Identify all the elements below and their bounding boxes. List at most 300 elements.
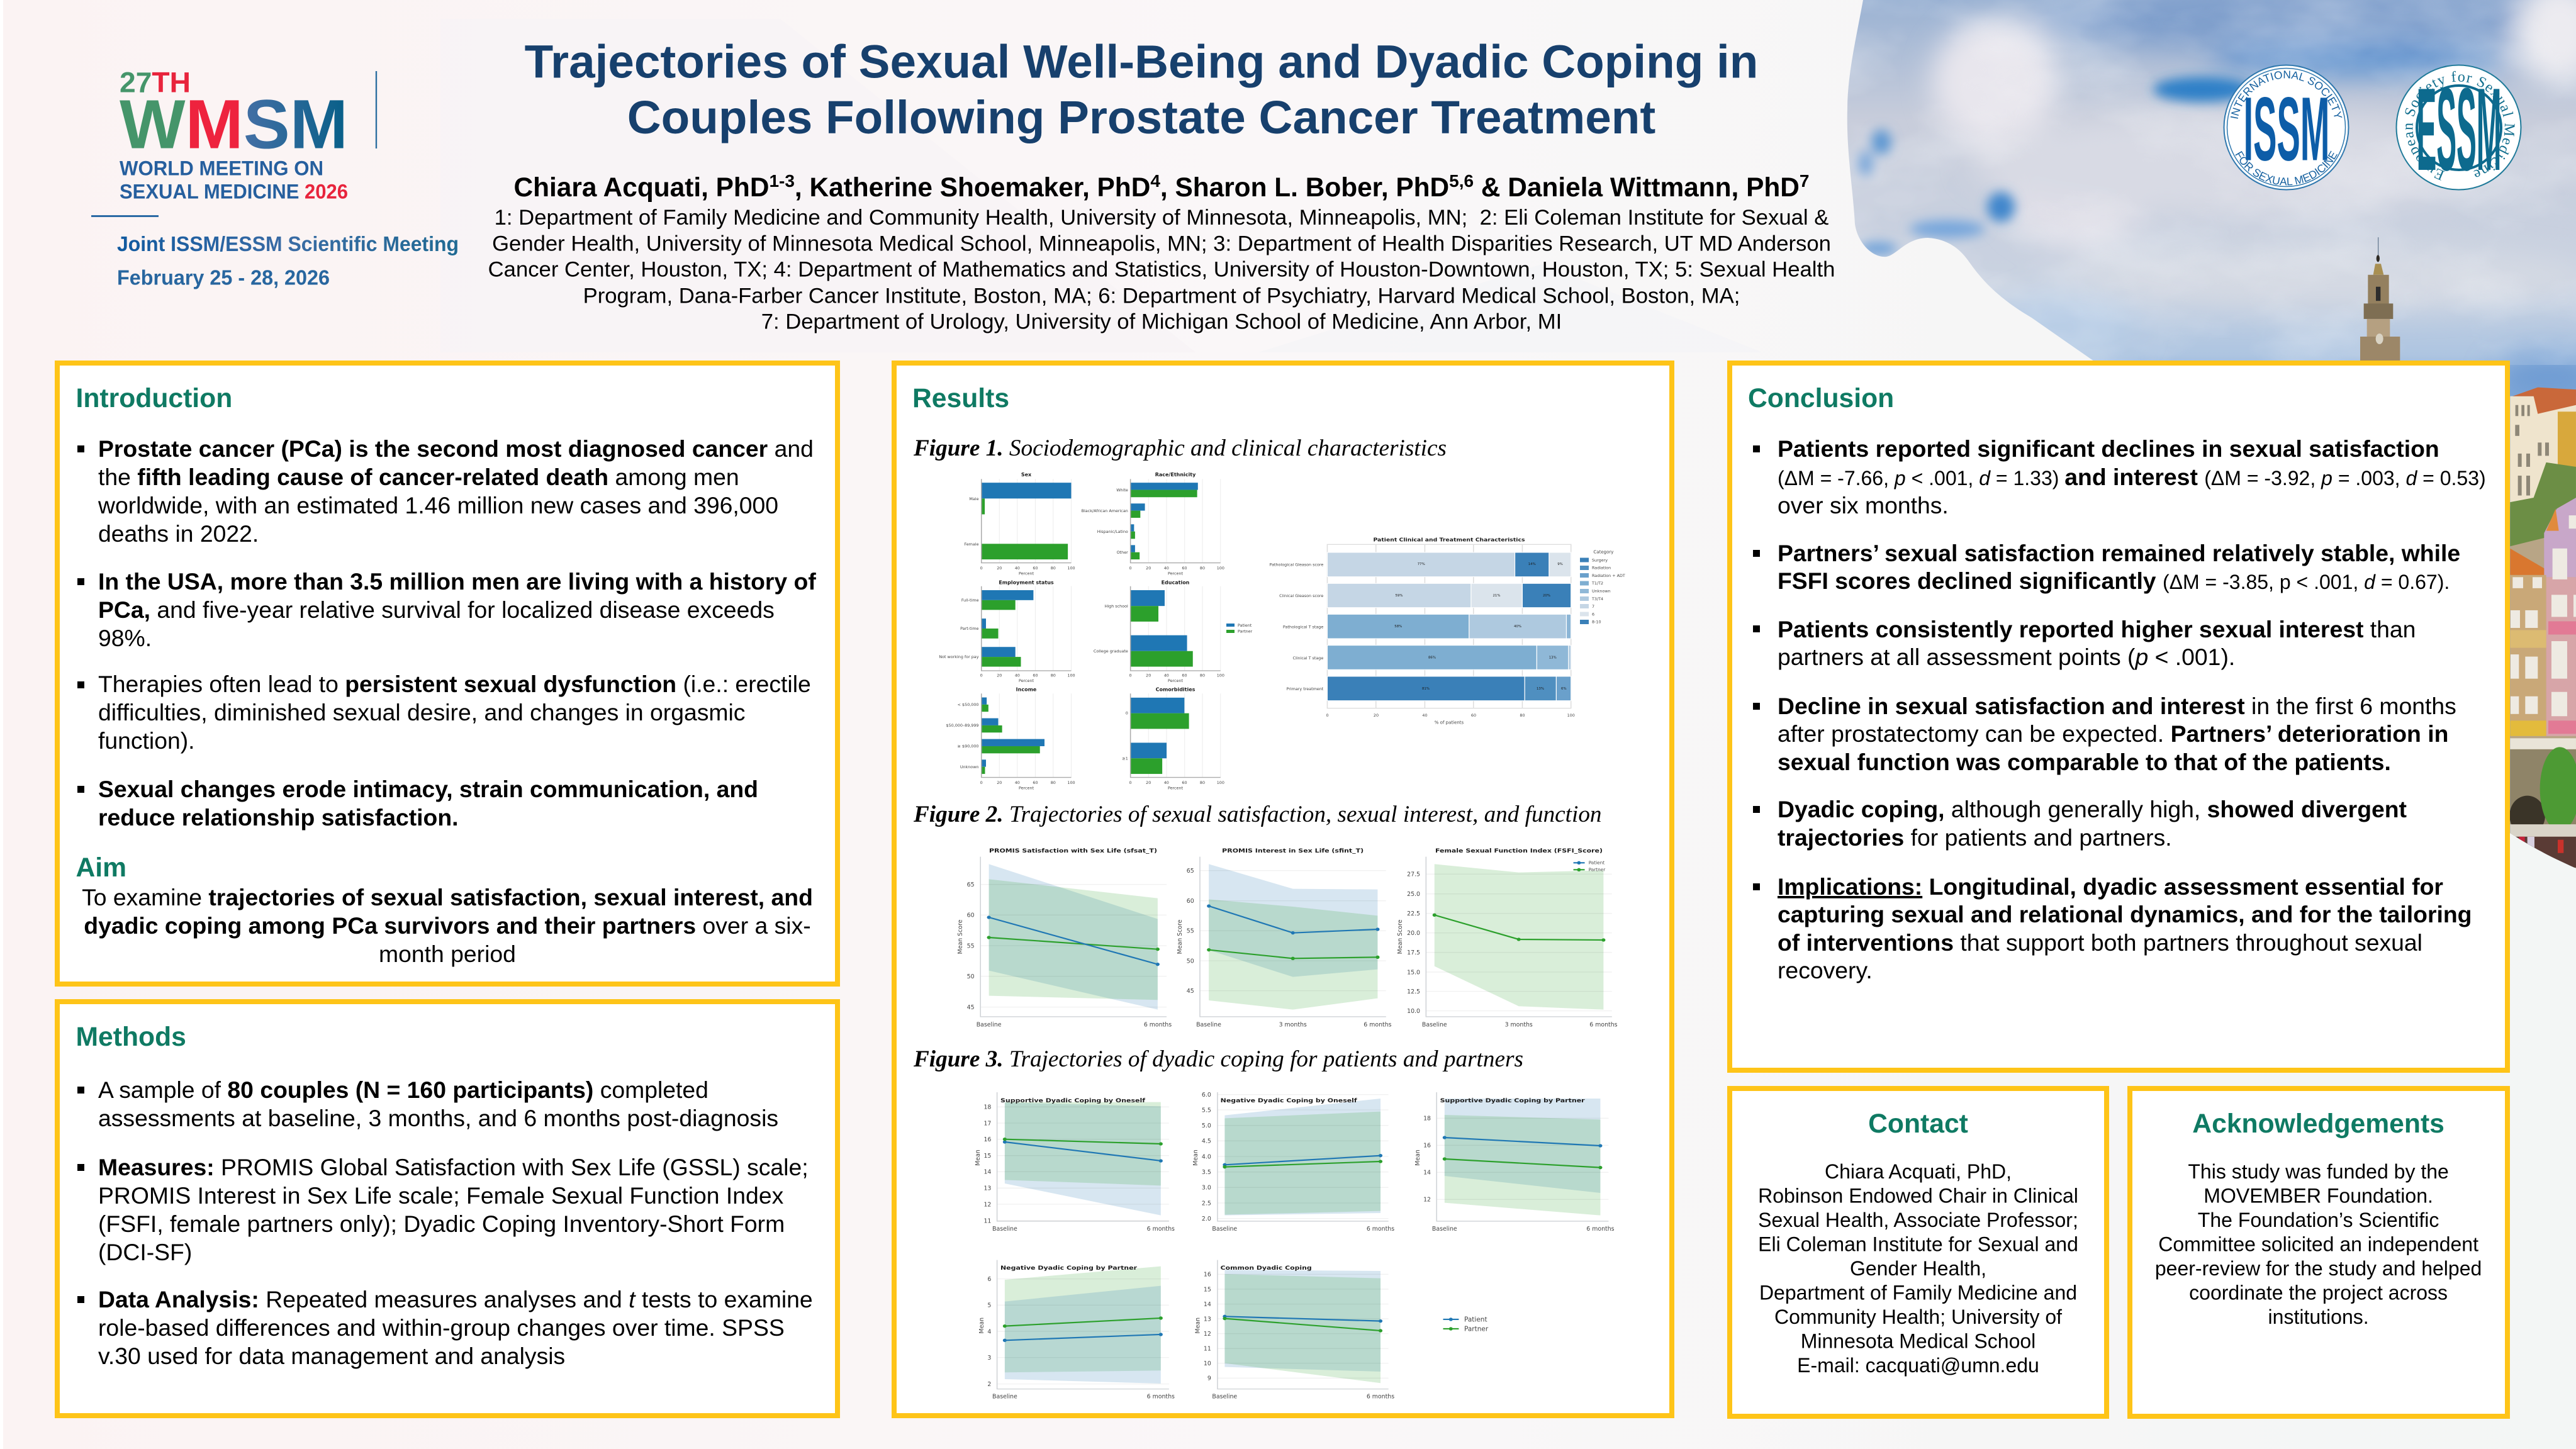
- chart: education: Percent: [1168, 678, 1184, 683]
- authors: 7: [1800, 171, 1809, 191]
- chart: patient clinical and treatment characteristics: 81%: [1422, 687, 1430, 691]
- chart: common dyadic coping: 14: [1204, 1301, 1211, 1308]
- chart: income: 60: [1033, 780, 1038, 785]
- chart: PROMIS satisfaction with sex life: 55: [967, 943, 975, 949]
- chart: patient clinical and treatment characteristics: 100: [1567, 713, 1575, 718]
- chart: sex: 20: [997, 566, 1002, 571]
- heading: introduction: Introduction: [76, 383, 232, 413]
- legend: treatment categories: Surgery: [1592, 557, 1608, 562]
- chart: negative dyadic coping by oneself: 4.5: [1202, 1138, 1211, 1145]
- chart: income: Percent: [1019, 785, 1034, 790]
- chart: income: $50,000–89,999: [946, 723, 979, 728]
- chart: common dyadic coping: 12: [1204, 1331, 1211, 1338]
- chart: sex: 80: [1051, 566, 1056, 571]
- logo text: 27TH: 27TH: [120, 66, 191, 98]
- text block: conclusion bullets: partners at all assessment points (p < .001).: [1778, 644, 2235, 670]
- text block: introduction bullets: function).: [98, 727, 195, 754]
- text block: methods bullets: v.30 used for data management and analysis: [98, 1343, 565, 1369]
- text block: introduction bullets: reduce relationship satisfaction.: [98, 804, 459, 831]
- chart: race and ethnicity: Percent: [1168, 571, 1184, 576]
- chart: income: Income: [1016, 687, 1037, 692]
- text block: conclusion bullets: over six months.: [1778, 492, 1949, 518]
- chart: PROMIS interest in sex life: Baseline: [1196, 1022, 1221, 1028]
- chart: patient clinical and treatment characteristics: 59%: [1396, 594, 1403, 598]
- chart: income: 20: [997, 780, 1002, 785]
- text block: conclusion bullets: Dyadic coping, although generally high, showed divergent: [1778, 796, 2407, 822]
- chart: negative dyadic coping by partner: 6: [987, 1276, 991, 1283]
- chart: PROMIS satisfaction with sex life: Mean Score: [957, 919, 964, 954]
- heading: results: Results: [912, 383, 1009, 413]
- chart: female sexual function index: 27.5: [1407, 871, 1420, 878]
- chart: negative dyadic coping by oneself: [1192, 1092, 1394, 1233]
- chart: supportive dyadic coping by partner: 16: [1423, 1143, 1431, 1150]
- text block: conclusion bullets: Patients consistently reported higher sexual interest than: [1778, 616, 2416, 642]
- heading: acknowledgements: Acknowledgements: [2192, 1109, 2444, 1139]
- text block: contact details: E-mail: cacquati@umn.edu: [1797, 1354, 2039, 1377]
- chart: income: 40: [1015, 780, 1020, 785]
- photo: riverside buildings: [2509, 388, 2576, 868]
- chart: common dyadic coping: 9: [1207, 1375, 1211, 1382]
- chart: female sexual function index: [1397, 848, 1618, 1028]
- legend: treatment categories: 6: [1592, 612, 1594, 617]
- chart: common dyadic coping: 13: [1204, 1316, 1211, 1323]
- chart: comorbidities: 0: [1126, 711, 1128, 716]
- chart: supportive dyadic coping by oneself: 14: [983, 1169, 991, 1176]
- chart: patient clinical and treatment characteristics: 20%: [1543, 594, 1550, 598]
- text block: aim: month period: [379, 941, 516, 967]
- chart: PROMIS interest in sex life: 55: [1187, 928, 1194, 935]
- chart: patient clinical and treatment characteristics: Clinical Gleason score: [1279, 593, 1323, 598]
- chart: PROMIS satisfaction with sex life: Baseline: [977, 1022, 1002, 1028]
- meeting name and dates: [117, 232, 459, 289]
- chart: supportive dyadic coping by partner: Baseline: [1432, 1226, 1457, 1233]
- chart: comorbidities: [1122, 687, 1224, 790]
- text block: aim: [82, 884, 813, 967]
- chart: employment status: 100: [1067, 673, 1075, 678]
- text block: conclusion bullets: recovery.: [1778, 957, 1873, 983]
- chart: negative dyadic coping by oneself: 2.5: [1202, 1200, 1211, 1207]
- chart: race and ethnicity: White: [1116, 488, 1128, 493]
- chart: supportive dyadic coping by oneself: Supportive Dyadic Coping by Oneself: [1000, 1098, 1145, 1104]
- chart: PROMIS interest in sex life: PROMIS Interest in Sex Life (sfint_T): [1222, 848, 1364, 854]
- chart: negative dyadic coping by oneself: 4.0: [1202, 1153, 1211, 1160]
- meeting name and dates: February 25 - 28, 2026: [117, 266, 330, 289]
- chart: female sexual function index: Partner: [1589, 867, 1605, 872]
- chart: patient clinical and treatment characteristics: 13%: [1549, 656, 1557, 659]
- chart: education: Education: [1162, 580, 1190, 585]
- icon: ISSM society logo: INTERNATIONAL SOCIETY: [2230, 70, 2342, 119]
- chart: supportive dyadic coping by oneself: Baseline: [992, 1226, 1017, 1233]
- chart: PROMIS satisfaction with sex life: 65: [967, 881, 975, 888]
- text block: methods bullets: role-based differences and within-group changes over time. SPSS: [98, 1314, 785, 1341]
- authors: 5,6: [1449, 171, 1474, 191]
- chart: female sexual function index: 22.5: [1407, 910, 1420, 917]
- text block: acknowledgements: The Foundation’s Scientific: [2198, 1209, 2439, 1231]
- chart: supportive dyadic coping by oneself: Mean: [975, 1150, 982, 1166]
- chart: common dyadic coping: Mean: [1194, 1318, 1202, 1333]
- chart: education: [1094, 580, 1224, 683]
- chart: sex: Percent: [1019, 571, 1034, 576]
- chart: supportive dyadic coping by partner: Mean: [1414, 1150, 1421, 1166]
- text block: aim: dyadic coping among PCa survivors and their partners over a six-: [84, 912, 811, 939]
- logo divider: [376, 71, 377, 148]
- chart: sex: 0: [980, 566, 983, 571]
- chart: patient clinical and treatment characteristics: [1270, 537, 1625, 725]
- chart: supportive dyadic coping by partner: 12: [1423, 1197, 1431, 1204]
- chart: negative dyadic coping by partner: 3: [987, 1355, 991, 1362]
- text block: conclusion bullets: Partners’ sexual satisfaction remained relatively stable, while: [1778, 540, 2460, 566]
- chart: income: < $50,000: [958, 702, 979, 707]
- chart: common dyadic coping: 10: [1204, 1360, 1211, 1367]
- chart: patient clinical and treatment characteristics: Pathological Gleason score: [1270, 562, 1323, 568]
- chart: sex: Female: [964, 542, 979, 547]
- legend: treatment categories: 8-10: [1592, 619, 1601, 624]
- panel: results: [894, 363, 1672, 1416]
- text block: introduction bullets: PCa, and five-year relative survival for localized disease exceeds: [98, 596, 775, 623]
- chart: PROMIS interest in sex life: 6 months: [1364, 1022, 1392, 1028]
- chart: income: 80: [1051, 780, 1056, 785]
- text block: contact details: Community Health; University of: [1774, 1306, 2062, 1328]
- authors: 1-3: [769, 171, 795, 191]
- text block: conclusion bullets: [1753, 435, 2486, 983]
- chart: comorbidities: Percent: [1168, 785, 1184, 790]
- affiliations: Cancer Center, Houston, TX; 4: Department of Mathematics and Statistics, University of Houston-Downtown, Houston, TX; 5: Sexual Health: [488, 258, 1835, 282]
- chart: female sexual function index: Baseline: [1422, 1022, 1447, 1028]
- text block: introduction bullets: 98%.: [98, 625, 152, 651]
- chart: negative dyadic coping by partner: 6 months: [1147, 1393, 1175, 1401]
- chart: patient clinical and treatment characteristics: Patient Clinical and Treatment Characteristics: [1373, 537, 1525, 542]
- chart: employment status: 80: [1051, 673, 1056, 678]
- figure 1 caption: Figure 1. Sociodemographic and clinical characteristics: [913, 435, 1447, 461]
- chart: common dyadic coping: 15: [1204, 1286, 1211, 1293]
- chart: negative dyadic coping by partner: Baseline: [992, 1393, 1017, 1401]
- chart: common dyadic coping: 6 months: [1367, 1393, 1394, 1401]
- chart: patient clinical and treatment characteristics: 9%: [1557, 562, 1563, 566]
- text block: conclusion bullets: sexual function was comparable to that of the patients.: [1778, 749, 2391, 775]
- chart: patient clinical and treatment characteristics: 40%: [1514, 625, 1521, 629]
- chart: female sexual function index: 25.0: [1407, 891, 1420, 898]
- panel: introduction and aim: [57, 363, 837, 984]
- figure 2 caption: Figure 2. Trajectories of sexual satisfaction, sexual interest, and function: [913, 802, 1602, 827]
- panel: conclusion: [1730, 363, 2507, 1070]
- text block: acknowledgements: institutions.: [2268, 1306, 2369, 1328]
- chart: PROMIS interest in sex life: 3 months: [1279, 1022, 1307, 1028]
- text block: acknowledgements: Committee solicited an independent: [2158, 1233, 2478, 1256]
- text block: introduction bullets: deaths in 2022.: [98, 520, 259, 547]
- chart: sex: 40: [1015, 566, 1020, 571]
- text block: methods bullets: A sample of 80 couples (N = 160 participants) completed: [98, 1077, 708, 1103]
- text block: contact details: Chiara Acquati, PhD,: [1825, 1160, 2012, 1183]
- chart: patient clinical and treatment characteristics: Primary treatment: [1287, 686, 1324, 691]
- chart: employment status: Part-time: [960, 626, 979, 631]
- chart: race and ethnicity: [1082, 472, 1224, 576]
- chart: supportive dyadic coping by oneself: 12: [983, 1201, 991, 1208]
- chart: sex: Sex: [1021, 472, 1032, 478]
- chart: race and ethnicity: Other: [1117, 550, 1128, 555]
- meeting name and dates: Joint ISSM/ESSM Scientific Meeting: [117, 232, 459, 255]
- icon: ISSM society logo: FOR SEXUAL MEDICINE: [2235, 151, 2338, 186]
- chart: PROMIS interest in sex life: 45: [1187, 988, 1194, 995]
- chart: negative dyadic coping by oneself: 3.0: [1202, 1185, 1211, 1192]
- logo text: World Meeting on Sexual Medicine 2026: [120, 157, 348, 203]
- chart: race and ethnicity: 80: [1200, 566, 1205, 571]
- chart: comorbidities: 100: [1217, 780, 1224, 785]
- text block: conclusion bullets: after prostatectomy can be expected. Partners’ deterioration in: [1778, 720, 2448, 747]
- chart: PROMIS interest in sex life: 50: [1187, 958, 1194, 965]
- chart: employment status: 60: [1033, 673, 1038, 678]
- text block: contact details: Robinson Endowed Chair in Clinical: [1758, 1184, 2078, 1207]
- authors: & Daniela Wittmann, PhD: [1474, 172, 1800, 202]
- chart: supportive dyadic coping by oneself: 16: [983, 1136, 991, 1143]
- text block: methods bullets: PROMIS Interest in Sex Life scale; Female Sexual Function Index: [98, 1182, 784, 1209]
- heading: methods: Methods: [76, 1022, 186, 1052]
- text block: contact details: Sexual Health, Associate Professor;: [1758, 1209, 2078, 1231]
- text block: introduction bullets: Therapies often lead to persistent sexual dysfunction (i.e.: erectile: [98, 671, 811, 697]
- chart: negative dyadic coping by oneself: 6.0: [1202, 1092, 1211, 1099]
- chart: supportive dyadic coping by oneself: 13: [983, 1185, 991, 1192]
- chart: employment status: Full-time: [961, 598, 979, 603]
- text block: introduction bullets: the fifth leading cause of cancer-related death among men: [98, 464, 739, 490]
- affiliations: Program, Dana-Farber Cancer Institute, Boston, MA; 6: Department of Psychiatry, Harvard Medical School, Boston, MA;: [583, 284, 1740, 308]
- text block: introduction bullets: Prostate cancer (PCa) is the second most diagnosed cancer and: [98, 435, 814, 462]
- chart: negative dyadic coping by partner: 5: [987, 1302, 991, 1309]
- text block: introduction bullets: difficulties, diminished sexual desire, and changes in orgasmic: [98, 699, 745, 725]
- chart: female sexual function index: 12.5: [1407, 988, 1420, 995]
- affiliations: [488, 206, 1835, 333]
- icon: ESSM society logo: ESSM: [2417, 63, 2501, 195]
- chart: female sexual function index: Patient: [1589, 859, 1604, 866]
- chart: race and ethnicity: 0: [1129, 566, 1132, 571]
- chart: comorbidities: 20: [1146, 780, 1151, 785]
- chart: race and ethnicity: 20: [1146, 566, 1151, 571]
- legend: patient and partner lines: Partner: [1464, 1325, 1489, 1333]
- chart: negative dyadic coping by oneself: 5.5: [1202, 1107, 1211, 1114]
- chart: patient clinical and treatment characteristics: Clinical T stage: [1293, 656, 1323, 661]
- icon: ESSM society logo: European Society for Sexual Medicine: [2405, 70, 2515, 181]
- chart: supportive dyadic coping by partner: 18: [1423, 1116, 1431, 1122]
- chart: negative dyadic coping by partner: 2: [987, 1381, 991, 1388]
- text block: acknowledgements: coordinate the project across: [2189, 1281, 2448, 1304]
- text block: conclusion bullets: capturing sexual and relational dynamics, and for the tailoring: [1778, 901, 2472, 927]
- chart: PROMIS satisfaction with sex life: PROMIS Satisfaction with Sex Life (sfsat_T): [989, 848, 1157, 854]
- chart: education: College graduate: [1094, 649, 1128, 654]
- text block: methods bullets: [77, 1077, 813, 1369]
- text block: contact details: Eli Coleman Institute for Sexual and: [1758, 1233, 2078, 1256]
- affiliations: Gender Health, University of Minnesota Medical School, Minneapolis, MN; 3: Department of Health Disparities Research, UT MD Anderson: [492, 232, 1831, 255]
- text block: conclusion bullets: (ΔM = -7.66, p < .001, d = 1.33) and interest (ΔM = -3.92, p = .003, d = 0.53): [1778, 464, 2486, 490]
- text block: methods bullets: Data Analysis: Repeated measures analyses and t tests to examine: [98, 1286, 813, 1312]
- chart: education: 40: [1164, 673, 1169, 678]
- figure 3 caption: Figure 3. Trajectories of dyadic coping for patients and partners: [913, 1046, 1523, 1072]
- title: [525, 35, 1758, 143]
- text block: conclusion bullets: Decline in sexual satisfaction and interest in the first 6 months: [1778, 693, 2456, 719]
- chart: sex: [964, 472, 1075, 576]
- text block: methods bullets: Measures: PROMIS Global Satisfaction with Sex Life (GSSL) scale;: [98, 1154, 809, 1180]
- chart: education: 20: [1146, 673, 1151, 678]
- text block: methods bullets: assessments at baseline, 3 months, and 6 months post-diagnosis: [98, 1105, 778, 1131]
- chart: patient clinical and treatment characteristics: 6%: [1561, 687, 1567, 691]
- chart: income: 0: [980, 780, 983, 785]
- logo text: World Meeting on Sexual Medicine 2026: SEXUAL MEDICINE 2026: [120, 181, 348, 203]
- chart: education: High school: [1105, 604, 1128, 609]
- text block: conclusion bullets: of interventions that support both partners throughout sexual: [1778, 929, 2422, 956]
- text block: introduction bullets: worldwide, with an estimated 1.46 million new cases and 396,000: [98, 492, 778, 518]
- header photo: sky, clouds and Porto buildings: [1825, 0, 2576, 881]
- chart: patient clinical and treatment characteristics: 20: [1374, 713, 1379, 718]
- legend: treatment categories: T3/T4: [1591, 596, 1603, 601]
- text block: contact details: Gender Health,: [1850, 1257, 1986, 1280]
- chart: patient clinical and treatment characteristics: 14%: [1528, 562, 1536, 566]
- chart: negative dyadic coping by oneself: 5.0: [1202, 1122, 1211, 1129]
- legend: patient and partner bars: Partner: [1238, 629, 1253, 634]
- chart: comorbidities: 40: [1164, 780, 1169, 785]
- chart: PROMIS interest in sex life: 60: [1187, 898, 1194, 905]
- chart: patient clinical and treatment characteristics: 86%: [1428, 656, 1436, 659]
- chart: female sexual function index: 6 months: [1589, 1022, 1618, 1028]
- chart: negative dyadic coping by oneself: 2.0: [1202, 1216, 1211, 1222]
- text block: acknowledgements: MOVEMBER Foundation.: [2204, 1184, 2433, 1207]
- chart: employment status: 40: [1015, 673, 1020, 678]
- authors: , Katherine Shoemaker, PhD: [795, 172, 1150, 202]
- text block: conclusion bullets: Implications: Longitudinal, dyadic assessment essential for: [1778, 873, 2443, 900]
- chart: negative dyadic coping by oneself: Baseline: [1212, 1226, 1237, 1233]
- chart: supportive dyadic coping by oneself: 6 months: [1147, 1226, 1175, 1233]
- logo text: WMSM: WMSM: [120, 86, 348, 164]
- chart: comorbidities: 80: [1200, 780, 1205, 785]
- chart: patient clinical and treatment characteristics: 0: [1326, 713, 1329, 718]
- text block: conclusion bullets: trajectories for patients and partners.: [1778, 824, 2172, 851]
- chart: female sexual function index: 17.5: [1407, 949, 1420, 956]
- text block: conclusion bullets: FSFI scores declined significantly (ΔM = -3.85, p < .001, d = 0.67).: [1778, 568, 2450, 594]
- chart: employment status: Employment status: [999, 580, 1054, 585]
- chart: comorbidities: 60: [1182, 780, 1187, 785]
- chart: supportive dyadic coping by oneself: 15: [983, 1153, 991, 1160]
- legend: treatment categories: Radiation + ADT: [1592, 573, 1625, 578]
- chart: supportive dyadic coping by oneself: [975, 1092, 1175, 1233]
- title: Couples Following Prostate Cancer Treatment: [627, 91, 1655, 143]
- chart: comorbidities: ≥1: [1122, 756, 1128, 761]
- chart: income: Unknown: [960, 764, 979, 769]
- legend: patient and partner lines: [1443, 1316, 1489, 1333]
- chart: female sexual function index: 10.0: [1407, 1008, 1420, 1015]
- icon: ISSM society logo: ISSM: [2244, 79, 2329, 180]
- text block: acknowledgements: peer-review for the study and helped: [2155, 1257, 2482, 1280]
- chart: employment status: [939, 580, 1075, 683]
- authors: 4: [1150, 171, 1160, 191]
- text block: contact details: Department of Family Medicine and: [1759, 1281, 2077, 1304]
- text block: contact details: [1758, 1160, 2078, 1377]
- chart: income: [946, 687, 1075, 790]
- chart: education: 80: [1200, 673, 1205, 678]
- chart: negative dyadic coping by oneself: Negative Dyadic Coping by Oneself: [1221, 1098, 1357, 1104]
- chart: common dyadic coping: 16: [1204, 1272, 1211, 1278]
- chart: patient clinical and treatment characteristics: 21%: [1493, 594, 1500, 598]
- chart: race and ethnicity: 40: [1164, 566, 1169, 571]
- chart: employment status: 0: [980, 673, 983, 678]
- chart: negative dyadic coping by oneself: Mean: [1192, 1150, 1199, 1166]
- legend: treatment categories: [1580, 550, 1625, 624]
- panel: acknowledgements: [2130, 1088, 2507, 1416]
- chart: patient clinical and treatment characteristics: 60: [1471, 713, 1476, 718]
- chart: education: 100: [1217, 673, 1224, 678]
- chart: negative dyadic coping by oneself: 6 months: [1367, 1226, 1394, 1233]
- chart: common dyadic coping: Baseline: [1212, 1393, 1237, 1401]
- logo rule: [91, 215, 159, 217]
- text block: introduction bullets: In the USA, more than 3.5 million men are living with a history of: [98, 568, 816, 595]
- legend: patient and partner bars: Patient: [1238, 623, 1252, 628]
- chart: negative dyadic coping by partner: [978, 1260, 1175, 1401]
- heading: aim: Aim: [76, 853, 126, 883]
- heading: conclusion: Conclusion: [1748, 383, 1894, 413]
- chart: negative dyadic coping by partner: Mean: [978, 1318, 985, 1333]
- chart: female sexual function index: 15.0: [1407, 969, 1420, 976]
- chart: employment status: Percent: [1019, 678, 1034, 683]
- legend: patient and partner bars: [1226, 623, 1253, 634]
- chart: female sexual function index: 3 months: [1505, 1022, 1533, 1028]
- chart: negative dyadic coping by partner: Negative Dyadic Coping by Partner: [1000, 1265, 1138, 1272]
- chart: supportive dyadic coping by partner: 14: [1423, 1170, 1431, 1177]
- chart: patient clinical and treatment characteristics: 77%: [1418, 562, 1425, 566]
- chart: negative dyadic coping by oneself: 3.5: [1202, 1169, 1211, 1176]
- chart: race and ethnicity: 100: [1217, 566, 1224, 571]
- chart: patient clinical and treatment characteristics: 58%: [1394, 625, 1402, 629]
- chart: patient clinical and treatment characteristics: % of patients: [1435, 720, 1464, 725]
- chart: common dyadic coping: 11: [1204, 1346, 1211, 1353]
- chart: employment status: 20: [997, 673, 1002, 678]
- chart: supportive dyadic coping by partner: 6 months: [1586, 1226, 1615, 1233]
- chart: race and ethnicity: Hispanic/Latino: [1097, 529, 1128, 534]
- chart: female sexual function index: 20.0: [1407, 930, 1420, 937]
- chart: PROMIS satisfaction with sex life: 50: [967, 973, 975, 980]
- chart: PROMIS interest in sex life: Mean Score: [1177, 919, 1184, 954]
- legend: treatment categories: Category: [1593, 550, 1613, 555]
- chart: PROMIS interest in sex life: 65: [1187, 868, 1194, 875]
- icon: ISSM society logo: [2224, 64, 2349, 190]
- chart: common dyadic coping: Common Dyadic Coping: [1221, 1265, 1312, 1272]
- panel: contact: [1730, 1088, 2107, 1416]
- legend: treatment categories: T1/T2: [1591, 581, 1603, 586]
- chart: PROMIS satisfaction with sex life: 60: [967, 912, 975, 919]
- chart: common dyadic coping: [1194, 1260, 1394, 1401]
- chart: supportive dyadic coping by partner: [1414, 1092, 1615, 1233]
- legend: treatment categories: Radiation: [1592, 565, 1611, 570]
- affiliations: 7: Department of Urology, University of Michigan School of Medicine, Ann Arbor, MI: [761, 310, 1562, 333]
- text block: aim: To examine trajectories of sexual satisfaction, sexual interest, and: [82, 884, 813, 910]
- icon: clock tower: [2360, 237, 2400, 363]
- authors: , Sharon L. Bober, PhD: [1160, 172, 1449, 202]
- text block: contact details: Minnesota Medical School: [1801, 1330, 2036, 1353]
- text block: acknowledgements: This study was funded by the: [2188, 1160, 2449, 1183]
- title: Trajectories of Sexual Well-Being and Dyadic Coping in: [525, 35, 1758, 88]
- chart: employment status: Not working for pay: [939, 654, 979, 659]
- chart: comorbidities: 0: [1129, 780, 1132, 785]
- logo: 27th WMSM conference: [91, 66, 459, 289]
- affiliations: 1: Department of Family Medicine and Community Health, University of Minnesota, Minneapolis, MN; 2: Eli Coleman Institute for Sexual &: [495, 206, 1828, 230]
- legend: patient and partner lines: Patient: [1464, 1316, 1487, 1324]
- chart: education: 60: [1182, 673, 1187, 678]
- chart: patient clinical and treatment characteristics: Pathological T stage: [1283, 624, 1323, 629]
- chart: negative dyadic coping by partner: 4: [987, 1328, 991, 1335]
- chart: PROMIS satisfaction with sex life: 45: [967, 1004, 975, 1011]
- heading: contact: Contact: [1868, 1109, 1968, 1139]
- text block: introduction bullets: [77, 435, 816, 831]
- chart: supportive dyadic coping by partner: Supportive Dyadic Coping by Partner: [1440, 1098, 1585, 1104]
- legend: treatment categories: 7: [1592, 604, 1594, 609]
- chart: PROMIS interest in sex life: [1177, 848, 1392, 1028]
- legend: treatment categories: Unknown: [1592, 589, 1611, 594]
- chart: comorbidities: Comorbidities: [1156, 687, 1196, 692]
- chart: patient clinical and treatment characteristics: 80: [1520, 713, 1525, 718]
